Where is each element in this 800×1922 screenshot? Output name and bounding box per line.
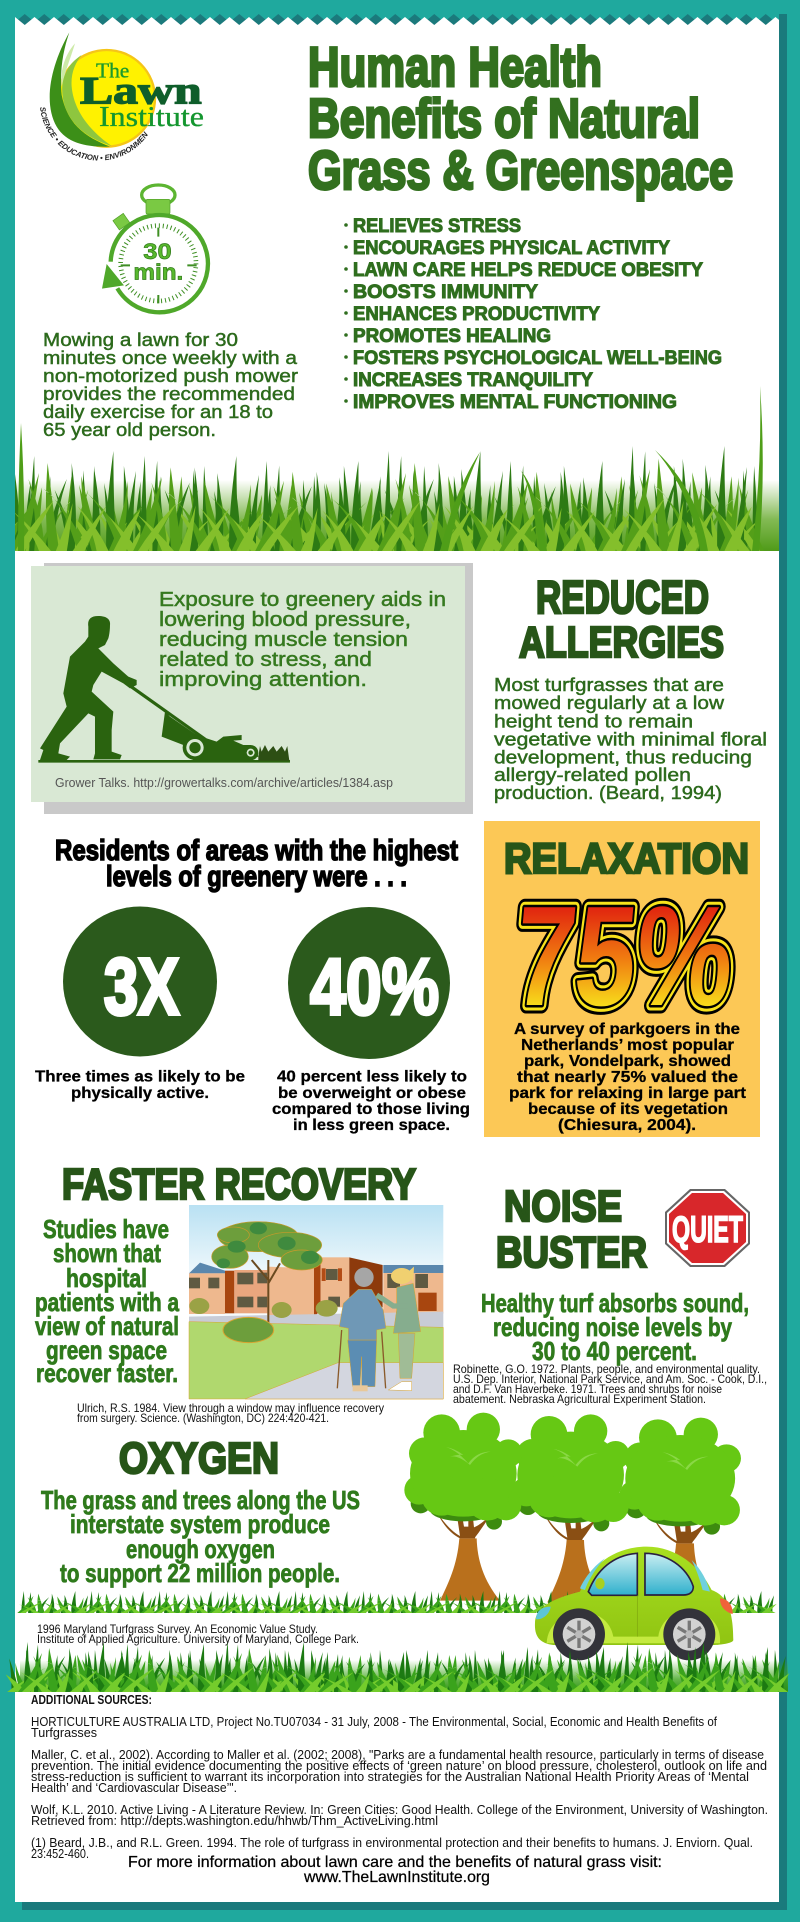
text: mowing exercise: daily exercise for an 18 to <box>43 402 273 422</box>
citation: Ulrich: Ulrich, R.S. 1984. View through a window may influence recovery <box>77 1401 384 1415</box>
text: mowed regularly at a low <box>494 693 725 713</box>
logo: The Lawn Institute: Lawn <box>80 68 202 112</box>
footer call to action: www.TheLawnInstitute.org <box>303 1869 490 1886</box>
text: healthy turf absorbs sound <box>481 1288 749 1366</box>
benefits bullet list: FOSTERS PSYCHOLOGICAL WELL-BEING <box>353 347 722 369</box>
text: development, thus reducing <box>494 748 752 768</box>
caption: 3X: physically active. <box>71 1085 209 1102</box>
stat: 40% <box>288 907 450 1059</box>
additional sources: (1) Beard, J.B., and R.L. Green. 1994. The role of turfgrass in environmental protection and their benefits to humans. J. Enviorn. Qual. <box>31 1836 753 1850</box>
text: height tend to remain <box>494 712 693 732</box>
stat: 40%: 40% <box>310 942 439 1031</box>
text: mowing exercise: 65 year old person. <box>43 420 216 440</box>
benefits bullet list: ENHANCES PRODUCTIVITY <box>353 303 600 325</box>
text: mowing exercise: non-motorized push mower <box>43 366 298 386</box>
footer call to action: For more information about lawn care and the benefits of natural grass visit: <box>128 1854 662 1871</box>
icon: 30 minute stopwatch <box>102 185 208 312</box>
logo: The Lawn Institute <box>40 32 204 160</box>
icon: quiet stop sign <box>665 1189 750 1267</box>
benefits bullet list: INCREASES TRANQUILITY <box>353 369 593 391</box>
thin grass strip <box>17 1591 777 1613</box>
heading: noise buster: BUSTER <box>496 1228 647 1277</box>
text: studies on recovery: shown that <box>53 1238 161 1268</box>
section: reduced allergies <box>494 571 767 803</box>
benefits bullet list <box>344 215 722 413</box>
text: greenery effect <box>159 589 446 691</box>
caption: 40%: compared to those living <box>272 1101 470 1118</box>
illustration: nurse and patient viewing green space <box>189 1205 443 1399</box>
stat: 3X <box>63 906 217 1056</box>
citation: Grower Talks: Grower Talks. http://growertalks.com/archive/articles/1384.asp <box>55 775 393 790</box>
citation: Robinette <box>453 1362 767 1406</box>
text: mowing exercise: minutes once weekly with a <box>43 348 298 368</box>
additional sources: ADDITIONAL SOURCES: <box>31 1693 152 1707</box>
icon: 30 minute stopwatch: min. <box>133 259 183 284</box>
citation: Robinette: and D.F. Van Haverbeke. 1971. Trees and shrubs for noise <box>453 1382 722 1396</box>
icon: 30 minute stopwatch: 30 <box>143 239 172 264</box>
logo: The Lawn Institute: Institute <box>99 102 204 133</box>
text: interstate oxygen <box>41 1485 360 1588</box>
additional sources <box>31 1693 768 1861</box>
text <box>494 675 767 803</box>
panel: greenery and blood pressure <box>31 563 473 814</box>
citation: Maryland turfgrass survey: 1996 Maryland Turfgrass Survey. An Economic Value Study. <box>37 1622 318 1636</box>
text: studies on recovery: patients with a <box>35 1287 179 1317</box>
additional sources: 23:452-460. <box>31 1847 89 1861</box>
citation: Maryland turfgrass survey: Institute of Applied Agriculture. University of Maryland, College Park. <box>37 1632 359 1646</box>
heading: residents of greenest areas: levels of greenery were . . . <box>106 861 407 893</box>
heading: residents of greenest areas <box>55 835 458 893</box>
additional sources: Maller, C. et al., 2002). According to Maller et al. (2002; 2008), "Parks are a fundamental health resource, particularly in terms of disease <box>31 1748 764 1762</box>
text: (Chiesura, 2004). <box>558 1117 696 1134</box>
text: mowing exercise <box>43 330 298 440</box>
silhouette: person pushing lawn mower <box>38 616 290 763</box>
text: healthy turf absorbs sound: 30 to 40 percent. <box>532 1336 697 1366</box>
text: mowing exercise: Mowing a lawn for 30 <box>43 330 238 350</box>
text: greenery effect: Exposure to greenery aids in <box>159 589 446 611</box>
citation: Ulrich <box>77 1401 384 1425</box>
text: Netherlands’ most popular <box>521 1037 734 1054</box>
heading: faster recovery: FASTER RECOVERY <box>62 1160 416 1209</box>
stat: 3X: 3X <box>104 942 179 1031</box>
citation: Ulrich: from surgery. Science. (Washington, DC) 224:420-421. <box>77 1411 329 1425</box>
text: studies on recovery: view of natural <box>35 1311 179 1341</box>
title: Human Health <box>308 35 602 98</box>
text: greenery effect: improving attention. <box>159 669 367 691</box>
citation: Robinette: Robinette, G.O. 1972. Plants, people, and environmental quality. <box>453 1362 760 1376</box>
text: production. (Beard, 1994) <box>494 783 722 803</box>
title: Benefits of Natural <box>308 87 700 149</box>
heading: noise buster: NOISE <box>504 1182 622 1231</box>
text: interstate oxygen: The grass and trees along the US <box>41 1485 360 1515</box>
additional sources: Health’ and ‘Cardiovascular Disease’". <box>31 1781 237 1795</box>
text: greenery effect: reducing muscle tension <box>159 629 408 651</box>
benefits bullet list: ENCOURAGES PHYSICAL ACTIVITY <box>353 237 670 259</box>
logo: The Lawn Institute: The <box>96 60 129 82</box>
caption: 40% <box>272 1068 470 1134</box>
big number: 75%: 75% <box>508 877 740 1036</box>
icon: quiet stop sign: QUIET <box>672 1209 743 1250</box>
caption: 40%: in less green space. <box>293 1117 450 1134</box>
heading: oxygen: OXYGEN <box>119 1434 279 1483</box>
additional sources: prevention. The initial evidence documenting the positive effects of ‘green nature’ on blood pressure, cholesterol, outlook on life and <box>31 1759 767 1773</box>
heading: RELAXATION <box>504 835 749 883</box>
heading: noise buster <box>496 1182 647 1277</box>
caption: 3X: Three times as likely to be <box>35 1068 245 1086</box>
text: greenery effect: related to stress, and <box>159 649 372 671</box>
footer call to action <box>128 1854 662 1886</box>
text <box>509 1021 747 1134</box>
text: mowing exercise: provides the recommended <box>43 384 295 404</box>
additional sources: HORTICULTURE AUSTRALIA LTD, Project No.TU07034 - 31 July, 2008 - The Environmental, Social, Economic and Health Benefits of <box>31 1715 717 1729</box>
text: A survey of parkgoers in the <box>514 1021 740 1038</box>
text: park for relaxing in large part <box>509 1085 747 1102</box>
big number: 75%: 75% <box>508 877 740 1036</box>
text: studies on recovery <box>35 1214 179 1388</box>
additional sources: Retrieved from: http://depts.washington.edu/hhwb/Thm_ActiveLiving.html <box>31 1814 438 1828</box>
trees <box>404 1413 741 1606</box>
caption: 3X <box>35 1068 245 1102</box>
panel: relaxation <box>484 821 760 1137</box>
text: interstate oxygen: to support 22 million people. <box>60 1558 340 1588</box>
heading: REDUCED <box>536 571 709 623</box>
additional sources: Turfgrasses <box>31 1726 97 1740</box>
heading: ALLERGIES <box>519 618 724 667</box>
text: that nearly 75% valued the <box>517 1069 738 1086</box>
text: studies on recovery: recover faster. <box>36 1358 178 1388</box>
top grass band <box>0 386 779 551</box>
text: healthy turf absorbs sound: reducing noise levels by <box>493 1312 732 1342</box>
text: Most turfgrasses that are <box>494 675 724 695</box>
additional sources: Wolf, K.L. 2010. Active Living - A Literature Review. In: Green Cities: Good Health. College of the Environment, University of Washington. <box>31 1803 768 1817</box>
text: allergy-related pollen <box>494 765 691 785</box>
text: interstate oxygen: enough oxygen <box>126 1534 275 1564</box>
benefits bullet list: RELIEVES STRESS <box>353 215 521 237</box>
citation: Maryland turfgrass survey <box>37 1622 359 1646</box>
benefits bullet list: IMPROVES MENTAL FUNCTIONING <box>353 391 677 413</box>
caption: 40%: be overweight or obese <box>278 1085 466 1102</box>
title <box>308 35 733 201</box>
text: studies on recovery: green space <box>46 1335 167 1365</box>
additional sources: stress-reduction is sufficient to warrant its incorporation into strategies for the Australian National Health Priority Areas of ‘Mental <box>31 1770 749 1784</box>
text: greenery effect: lowering blood pressure, <box>159 609 411 631</box>
big number: 75%: 75% <box>508 877 740 1036</box>
text: studies on recovery: Studies have <box>43 1214 169 1244</box>
text: because of its vegetation <box>528 1101 728 1118</box>
citation: Robinette: abatement. Nebraska Agricultural Experiment Station. <box>453 1392 706 1406</box>
benefits bullet list: LAWN CARE HELPS REDUCE OBESITY <box>353 259 703 281</box>
text: park, Vondelpark, showed <box>524 1053 731 1070</box>
illustration: green car <box>535 1547 733 1660</box>
caption: 40%: 40 percent less likely to <box>277 1068 467 1086</box>
benefits bullet list: BOOSTS IMMUNITY <box>353 281 538 303</box>
text: interstate oxygen: interstate system produce <box>70 1509 330 1539</box>
text: vegetative with minimal floral <box>494 730 767 750</box>
heading <box>519 571 724 667</box>
heading: residents of greenest areas: Residents of areas with the highest <box>55 835 458 867</box>
bottom grass band <box>6 1642 790 1692</box>
text: studies on recovery: hospital <box>66 1263 147 1293</box>
benefits bullet list: PROMOTES HEALING <box>353 325 551 347</box>
